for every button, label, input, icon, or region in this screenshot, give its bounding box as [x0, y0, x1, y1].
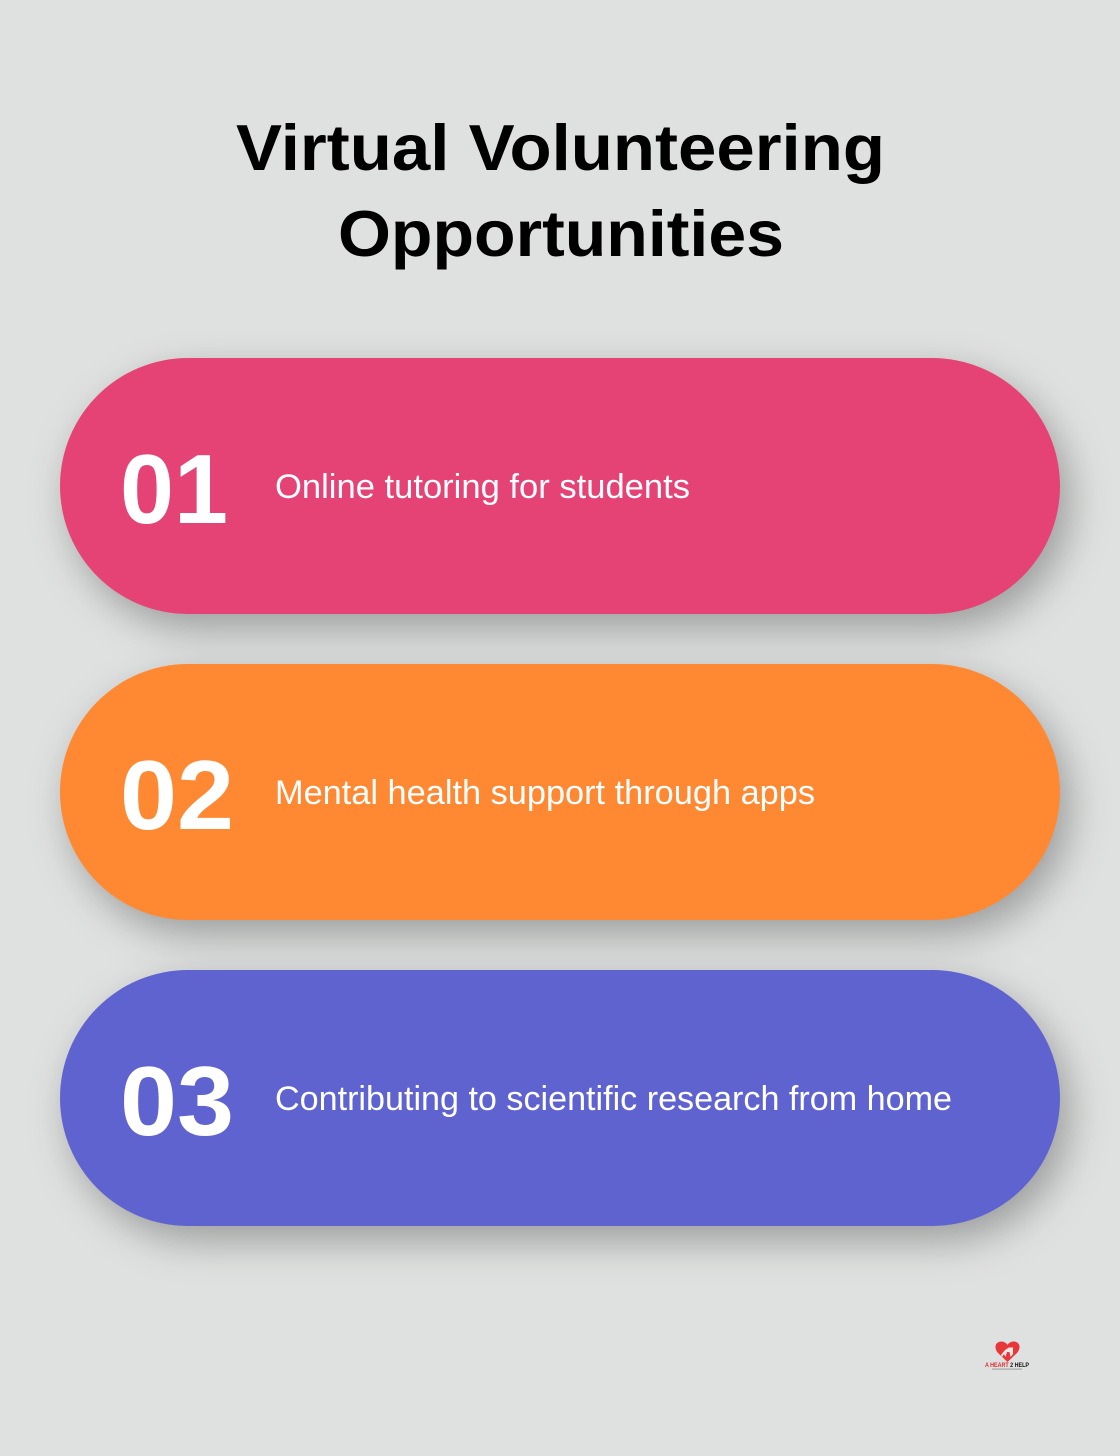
- title: Opportunities: [338, 197, 784, 270]
- panel: online tutoring: 01: [120, 434, 228, 544]
- panel: scientific research: 03: [120, 1046, 234, 1156]
- panel: online tutoring: [60, 358, 1070, 629]
- panel: scientific research: [60, 970, 1070, 1241]
- panel: mental health support: 02: [120, 740, 234, 850]
- panel: scientific research: Contributing to scientific research from home: [275, 1080, 952, 1118]
- title: [236, 111, 885, 270]
- title: Virtual Volunteering: [236, 111, 885, 184]
- panel: mental health support: Mental health support through apps: [275, 774, 815, 812]
- icon: logo: [985, 1342, 1029, 1370]
- panel: mental health support: [60, 664, 1070, 935]
- panel: online tutoring: Online tutoring for students: [275, 468, 690, 506]
- icon: logo: A HEART 2 HELP: [985, 1363, 1029, 1369]
